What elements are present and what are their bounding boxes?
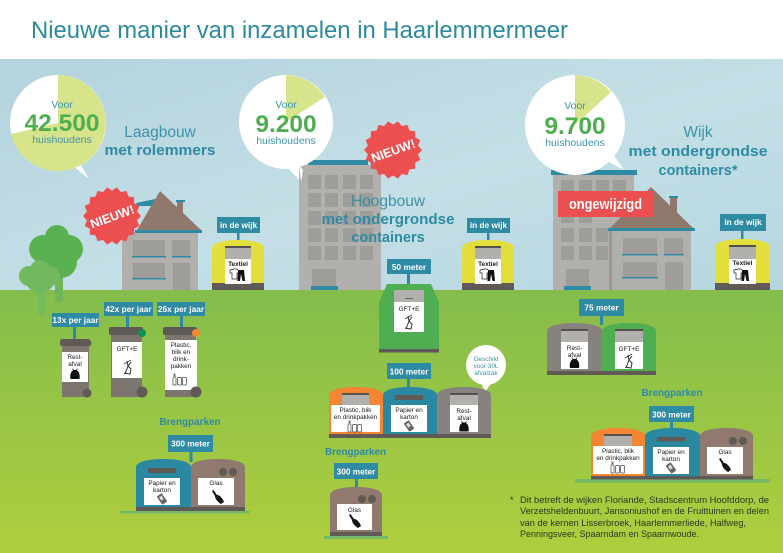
footnote: Penningsveer, Spaarndam en Spaarnwoude.	[520, 529, 699, 539]
callout: geschikt voor 30L afvalzak: afvalzak	[474, 370, 499, 377]
bubble: 9.200 huishoudens: huishoudens	[256, 135, 316, 147]
containers: hoogbouw 100 meter: 100 meter	[390, 366, 429, 376]
textile container right: Textiel	[733, 260, 753, 267]
heading: laagbouw	[104, 124, 216, 159]
badge: ongewijzigd: ongewijzigd	[569, 197, 642, 213]
container: gft+e hoogbouw	[379, 259, 439, 352]
title: Nieuwe manier van inzamelen in Haarlemmermeer	[31, 17, 568, 44]
bin: restafval rolemmer	[52, 313, 99, 398]
heading: laagbouw: met rolemmers	[104, 143, 216, 159]
brengpark left: papier and glas: karton	[153, 487, 171, 494]
bubble: 42.500 huishoudens: Voor	[51, 99, 73, 111]
badge: nieuw laagbouw	[83, 187, 141, 245]
heading: brengparken left: Brengparken	[160, 417, 220, 428]
heading: laagbouw: Laagbouw	[124, 124, 197, 141]
bubble: 42.500 huishoudens	[10, 75, 106, 179]
brengpark middle: glas: Glas	[348, 507, 361, 514]
containers: wijk 75 meter: Rest-	[567, 345, 582, 352]
footnote: Dit betreft de wijken Floriande, Stadscentrum Hoofddorp, de	[520, 495, 769, 505]
bin: plastic rolemmer: blik en	[172, 349, 191, 356]
heading: hoogbouw: Hoogbouw	[351, 193, 426, 210]
footnote: van de kernen Lisserbroek, Haarlemmerliede, Halfweg,	[520, 518, 746, 528]
badge: nieuw hoogbouw: NIEUW!	[369, 137, 417, 165]
containers: hoogbouw 100 meter: Papier en	[395, 407, 423, 414]
bubble: 9.700 huishoudens: Voor	[564, 100, 586, 112]
bin: plastic rolemmer: pakken	[171, 363, 192, 370]
containers: wijk 75 meter: afval	[568, 352, 581, 359]
house: laagbouw	[122, 191, 202, 290]
sky background	[0, 59, 783, 291]
badge: nieuw laagbouw: NIEUW!	[88, 203, 136, 231]
bin: gft+e rolemmer: 42x per jaar	[105, 304, 152, 314]
bin: plastic rolemmer: drink-	[173, 356, 189, 363]
heading: hoogbouw	[322, 193, 454, 246]
bin: gft+e rolemmer: GFT+E	[117, 346, 137, 353]
footnote: *	[510, 495, 514, 505]
brengpark right: plastic, papier, glas: Plastic, blik	[602, 448, 635, 455]
bubble: 42.500 huishoudens: 42.500	[25, 110, 99, 137]
brengpark right: plastic, papier, glas: Papier en	[657, 449, 685, 456]
building and house: wijk	[551, 170, 695, 290]
brengpark right: plastic, papier, glas: Glas	[718, 449, 732, 456]
bubble: 9.700 huishoudens: 9.700	[544, 113, 606, 140]
heading: wijk: Wijk	[683, 124, 713, 141]
bin: plastic rolemmer: 26x per jaar	[158, 304, 205, 314]
brengpark right: plastic, papier, glas	[575, 406, 770, 482]
brengpark left: papier and glas: 300 meter	[171, 438, 211, 448]
heading: hoogbouw: met ondergrondse	[322, 212, 454, 228]
containers: hoogbouw 100 meter: Plastic, blik	[340, 407, 372, 414]
textile container left: in de wijk	[220, 220, 258, 230]
brengpark left: papier and glas	[120, 435, 250, 514]
callout: geschikt voor 30L afvalzak: Geschikt	[474, 356, 499, 363]
bubble: 42.500 huishoudens: huishoudens	[32, 134, 92, 146]
brengpark middle: glas	[324, 463, 388, 539]
bin: restafval rolemmer: 13x per jaar	[52, 315, 99, 325]
containers: hoogbouw 100 meter: Rest-	[456, 408, 472, 415]
grass background	[0, 290, 783, 553]
containers: hoogbouw 100 meter: en drinkpakken	[334, 414, 378, 421]
container: gft+e hoogbouw: 50 meter	[392, 262, 427, 272]
callout: geschikt voor 30L afvalzak	[466, 345, 506, 392]
textile container right: in de wijk	[724, 217, 762, 227]
textile container middle: Textiel	[478, 261, 498, 268]
brengpark middle: glas: 300 meter	[337, 466, 376, 476]
bubble: 9.700 huishoudens: huishoudens	[545, 137, 605, 149]
brengpark left: papier and glas: Glas	[209, 480, 223, 487]
bin: plastic rolemmer	[157, 302, 205, 398]
brengpark right: plastic, papier, glas: karton	[662, 456, 680, 463]
containers: wijk 75 meter	[547, 299, 656, 375]
callout: geschikt voor 30L afvalzak: voor 30L	[474, 363, 499, 370]
heading: wijk	[628, 124, 768, 179]
bin: gft+e rolemmer	[104, 302, 153, 398]
building: hoogbouw windows	[299, 165, 373, 290]
badge: nieuw hoogbouw	[364, 121, 422, 179]
textile container right	[715, 214, 770, 290]
heading: wijk: met ondergrondse	[628, 144, 768, 160]
trees	[19, 225, 83, 315]
containers: wijk 75 meter: 75 meter	[584, 302, 619, 312]
containers: hoogbouw 100 meter: afval	[457, 415, 471, 422]
heading: brengparken middle: Brengparken	[325, 447, 386, 458]
textile container middle: in de wijk	[470, 220, 508, 230]
badge: ongewijzigd	[558, 191, 653, 217]
bubble: 9.200 huishoudens	[239, 75, 381, 290]
heading: wijk: containers*	[659, 163, 738, 179]
containers: wijk 75 meter: GFT+E	[619, 346, 639, 353]
textile container left	[212, 217, 264, 290]
container: gft+e hoogbouw: GFT+E	[399, 306, 419, 313]
containers: hoogbouw 100 meter	[329, 363, 491, 438]
heading: brengparken right: Brengparken	[642, 388, 702, 399]
bubble: 9.700 huishoudens	[525, 75, 625, 175]
footnote: Verzetsheldenbuurt, Jansoniushof en de Fruittuinen en delen	[520, 506, 769, 516]
bin: plastic rolemmer: Plastic,	[171, 342, 192, 349]
brengpark right: plastic, papier, glas: en drinkpakken	[596, 455, 640, 462]
textile container middle	[462, 218, 514, 290]
bubble: 9.200 huishoudens: Voor	[275, 99, 297, 111]
brengpark right: plastic, papier, glas: 300 meter	[652, 410, 692, 420]
bubble: 9.200 huishoudens: 9.200	[255, 111, 317, 138]
containers: hoogbouw 100 meter: karton	[400, 414, 418, 421]
footnote	[510, 495, 769, 539]
brengpark left: papier and glas: Papier en	[148, 480, 176, 487]
bin: restafval rolemmer: Rest-	[67, 354, 83, 361]
bin: restafval rolemmer: afval	[68, 361, 82, 368]
textile container left: Textiel	[228, 261, 248, 268]
heading: hoogbouw: containers	[351, 230, 425, 246]
